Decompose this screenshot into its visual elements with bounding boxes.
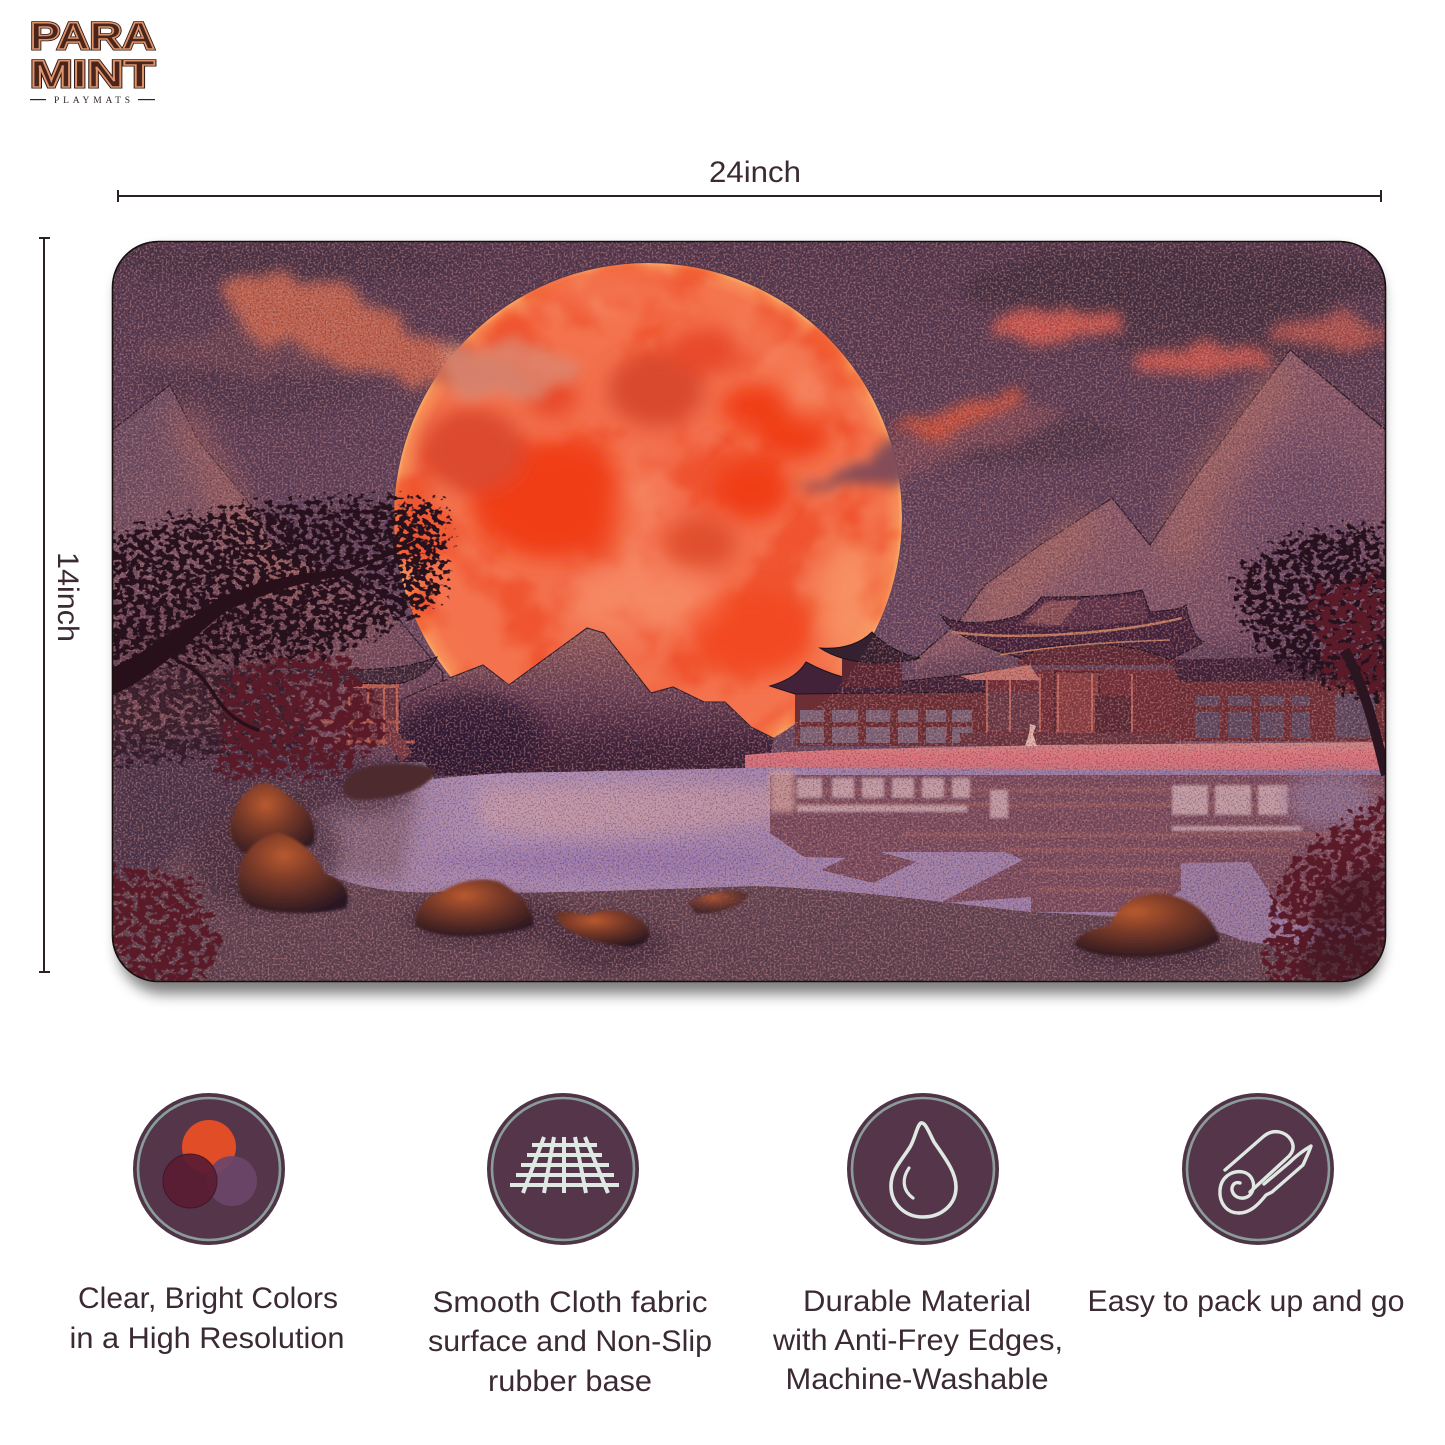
- left ground shade: [112, 730, 420, 880]
- logo word PARA: PARA: [30, 16, 155, 58]
- logo: Para Mint Playmats: [30, 16, 155, 106]
- lake: [284, 768, 1386, 945]
- height dimension: 14inch: [39, 238, 84, 972]
- wing left: [795, 690, 990, 746]
- foreground clouds: [140, 272, 1399, 490]
- front hills: [395, 628, 773, 775]
- right tree: [1215, 510, 1400, 775]
- temple reflection: [770, 770, 1386, 925]
- playmat illustration: [90, 241, 1400, 1000]
- logo word MINT: MINT: [30, 54, 155, 96]
- dark storm clouds: [90, 244, 1400, 466]
- label: surface and Non-Slip: [428, 1325, 712, 1358]
- feature 4: portable: [1088, 1093, 1404, 1318]
- label: Clear, Bright Colors: [78, 1282, 338, 1315]
- sky: [112, 241, 1386, 982]
- icon: rolled mat: [1182, 1093, 1334, 1245]
- left pagoda: [288, 657, 440, 788]
- main roof: [1018, 644, 1175, 665]
- playmat edge: [112, 242, 1386, 982]
- blood moon: [390, 260, 910, 771]
- far shore: [745, 742, 1386, 772]
- label: Smooth Cloth fabric: [432, 1286, 708, 1319]
- label: Durable Material: [803, 1285, 1031, 1318]
- logo word PARA: PARA: [30, 16, 155, 58]
- left mountain: [112, 385, 443, 780]
- wing right: [1175, 675, 1386, 741]
- rocks: [230, 764, 1220, 958]
- lake highlights: [285, 784, 780, 880]
- rock shadows: [190, 765, 1235, 971]
- logo word MINT: MINT: [30, 54, 155, 96]
- width dimension: 24inch: [118, 156, 1381, 202]
- sand foreground: [112, 760, 1386, 982]
- feature 3: durable: [772, 1093, 1063, 1396]
- icon: water drop: [847, 1093, 999, 1245]
- label: with Anti-Frey Edges,: [772, 1324, 1063, 1357]
- label: Machine-Washable: [786, 1363, 1048, 1396]
- left tree: [90, 486, 462, 790]
- playmat shadow: [118, 250, 1382, 994]
- feature 2: cloth: [428, 1093, 712, 1398]
- left mountain lit ridge: [180, 410, 300, 590]
- small tower: [842, 658, 902, 687]
- icon: overlapping colour circles: [133, 1093, 285, 1245]
- label: Easy to pack up and go: [1088, 1285, 1404, 1318]
- label: rubber base: [488, 1365, 652, 1398]
- grain texture: [112, 241, 1386, 982]
- feature 1: colors: [70, 1093, 344, 1355]
- right mountains: [915, 350, 1386, 760]
- lantern statue: [1025, 724, 1037, 746]
- base platform: [960, 733, 1175, 746]
- main body: [985, 670, 1175, 740]
- left hill shade: [398, 693, 542, 777]
- width label: 24inch: [709, 156, 801, 189]
- height label: 14inch: [51, 552, 84, 642]
- foreground shrubs: [90, 780, 1400, 1000]
- icon: woven grid: [487, 1093, 639, 1245]
- tree backing shade: [100, 590, 320, 730]
- logo tagline: PLAYMATS: [54, 96, 130, 106]
- temple: main hall: [770, 590, 1386, 746]
- label: in a High Resolution: [70, 1322, 344, 1355]
